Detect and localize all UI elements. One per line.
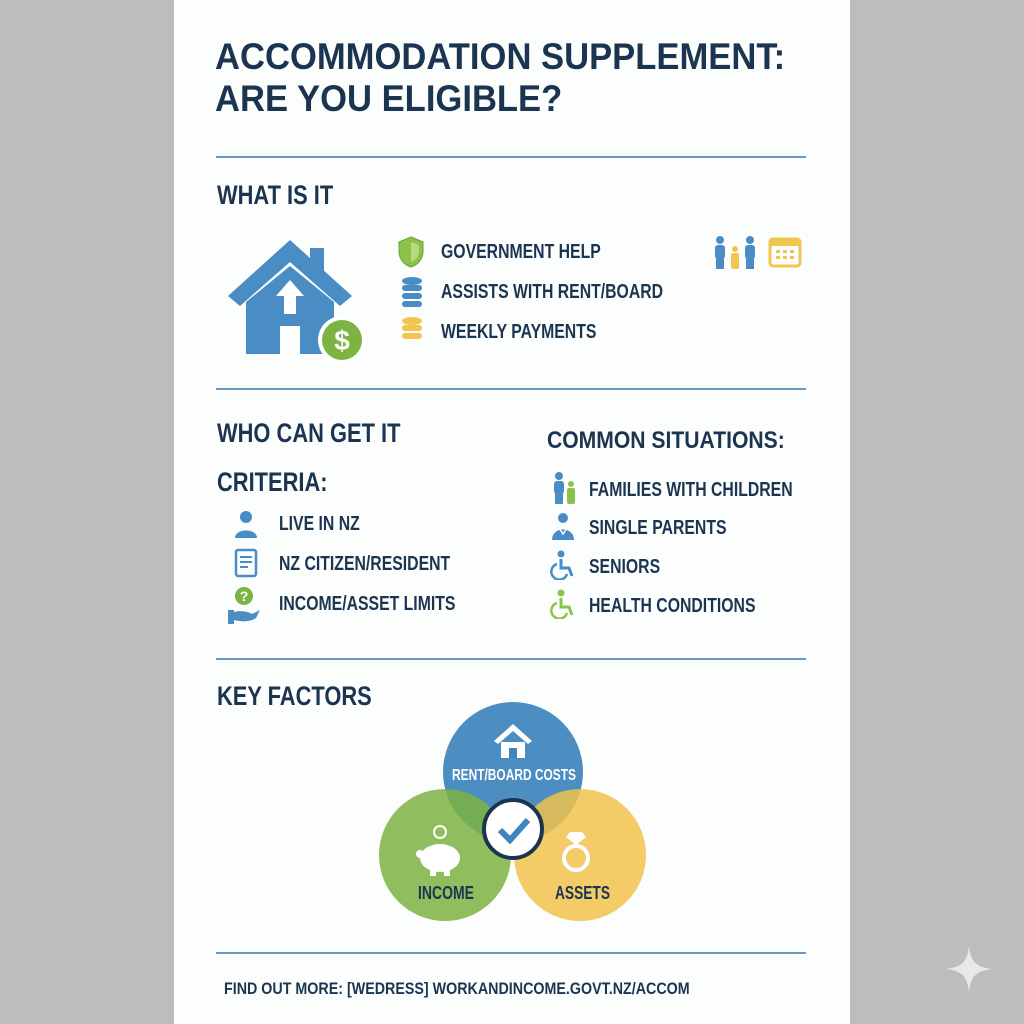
- title: [215, 36, 785, 119]
- icon: check: [484, 800, 542, 858]
- heading: common situations: COMMON SITUATIONS:: [547, 427, 785, 454]
- text: income limits: INCOME/ASSET LIMITS: [279, 593, 455, 615]
- panel: page: [174, 0, 850, 1024]
- label: assets: ASSETS: [555, 883, 610, 903]
- heading: key factors: KEY FACTORS: [217, 681, 372, 711]
- text: health conditions: HEALTH CONDITIONS: [589, 595, 755, 617]
- icon: wheelchair green: [550, 590, 574, 619]
- icon: document: [234, 548, 258, 578]
- list: criteria: [228, 511, 455, 624]
- icon: shield: [398, 236, 424, 268]
- icon: ring: [564, 832, 588, 870]
- title: ACCOMMODATION SUPPLEMENT:: [215, 36, 785, 77]
- text: assists with rent: ASSISTS WITH RENT/BOARD: [441, 281, 663, 303]
- icon: family: [715, 236, 755, 269]
- icon: blue coins: [402, 277, 422, 307]
- icon: piggy bank: [416, 826, 460, 876]
- icon: hand with question: ?: [240, 588, 248, 604]
- icon: person: [235, 511, 257, 538]
- icon: hand with question: [228, 587, 260, 624]
- title: ARE YOU ELIGIBLE?: [215, 78, 562, 119]
- label: income: INCOME: [418, 883, 474, 903]
- text: single parents: SINGLE PARENTS: [589, 517, 727, 539]
- icon: parent and child: [554, 472, 575, 504]
- text: live in nz: LIVE IN NZ: [279, 513, 360, 535]
- label: rent/board: RENT/BOARD COSTS: [452, 767, 576, 784]
- icon: house with dollar: [228, 240, 362, 360]
- heading: criteria: CRITERIA:: [217, 467, 328, 497]
- heading: what is it: WHAT IS IT: [217, 180, 333, 210]
- icon: house with dollar: $: [334, 325, 350, 356]
- icon: single parent: [552, 513, 574, 540]
- text: government help: GOVERNMENT HELP: [441, 241, 601, 263]
- text: seniors: SENIORS: [589, 556, 660, 578]
- chart: venn diagram: [379, 702, 646, 921]
- text: families: FAMILIES WITH CHILDREN: [589, 479, 793, 501]
- text: weekly payments: WEEKLY PAYMENTS: [441, 321, 596, 343]
- footer text: FIND OUT MORE: [WEDRESS] WORKANDINCOME.GOVT.NZ/ACCOM: [224, 979, 690, 998]
- heading: who can get it: WHO CAN GET IT: [217, 418, 400, 448]
- icon: sparkle: [946, 946, 992, 992]
- icon: house: [494, 724, 532, 758]
- icon: wheelchair blue: [550, 550, 574, 580]
- list: situations: [550, 472, 793, 619]
- icon: calendar: [768, 238, 802, 268]
- icon: yellow coins: [402, 317, 422, 339]
- text: citizen: NZ CITIZEN/RESIDENT: [279, 553, 450, 575]
- list: what is it: [398, 236, 663, 343]
